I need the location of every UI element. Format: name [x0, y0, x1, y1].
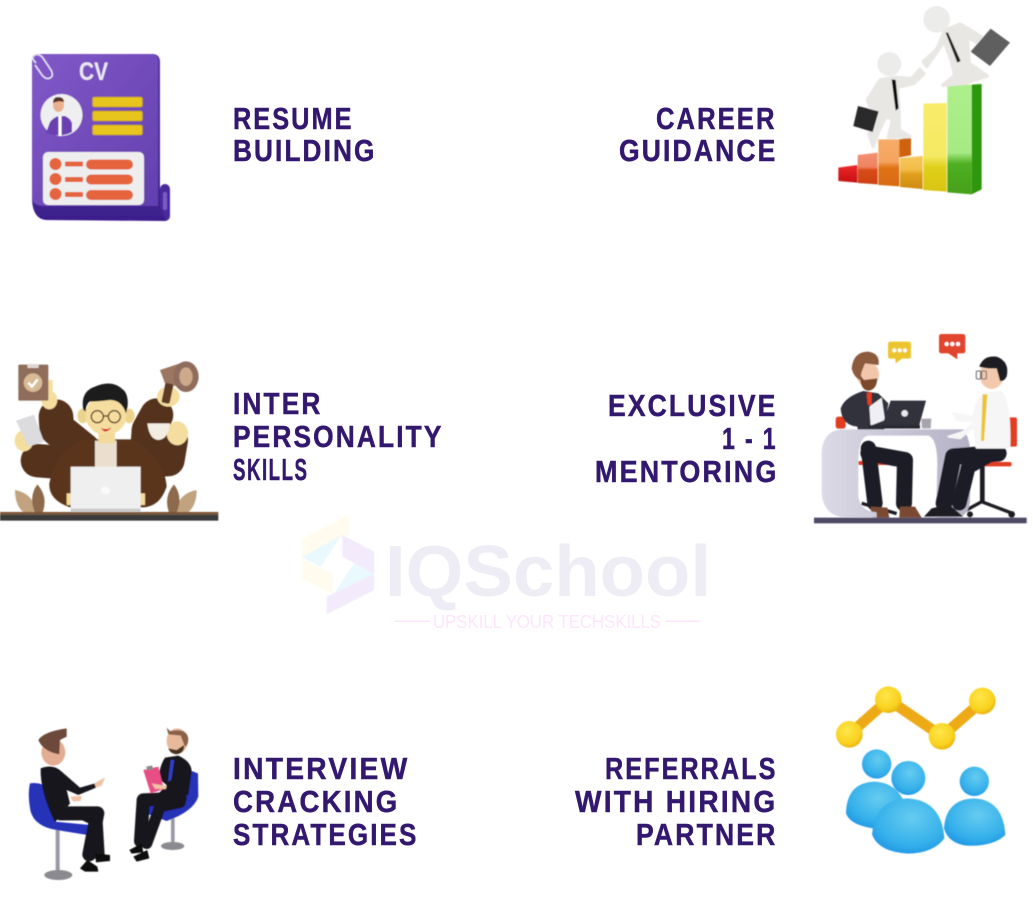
- watermark emblem: [302, 515, 374, 614]
- hands: [15, 380, 188, 505]
- heading: inter personality skills: [233, 386, 444, 487]
- icon: multitasking person: [0, 361, 218, 521]
- laptop: [71, 467, 141, 512]
- panel: resume building: [32, 54, 376, 221]
- details card: [43, 152, 144, 205]
- desk: [822, 429, 971, 517]
- CV label: CV: [79, 58, 108, 86]
- megaphone: [160, 361, 199, 404]
- heading: career guidance: [619, 101, 778, 168]
- watermark wordmark: IQSchool: [385, 532, 711, 612]
- panel: interview cracking strategies: [29, 728, 419, 880]
- leaves: [15, 484, 197, 512]
- speech bubbles: [888, 334, 965, 363]
- heading: exclusive 1-1 mentoring: EXCLUSIVE: [608, 388, 778, 423]
- network nodes: [836, 686, 996, 750]
- right person: [129, 728, 192, 862]
- icon: mentoring meeting: [814, 334, 1027, 523]
- heading: referrals with hiring partner: [575, 751, 778, 852]
- heading: interview cracking strategies: [233, 751, 418, 852]
- heading: referrals with hiring partner: PARTNER: [636, 817, 778, 852]
- floor: [814, 518, 1027, 523]
- bars: [838, 84, 982, 194]
- heading: interview cracking strategies: CRACKING: [233, 784, 400, 819]
- heading: career guidance: CAREER: [656, 101, 776, 136]
- heading: interview cracking strategies: INTERVIEW: [233, 751, 410, 786]
- heading: inter personality skills: SKILLS: [233, 452, 308, 487]
- right chair: [146, 771, 198, 850]
- colleague in white shirt: [924, 356, 1009, 517]
- icon: CV document: [32, 54, 170, 221]
- watermark: IQSchool logo: [302, 515, 711, 632]
- icon: interview chairs: [29, 728, 198, 880]
- panel: career guidance: [619, 6, 1010, 194]
- panel: referrals with hiring partner: [575, 686, 1005, 854]
- avatar: [40, 94, 82, 136]
- watermark tagline: UPSKILL YOUR TECHSKILLS: [433, 612, 661, 632]
- network links: [849, 700, 982, 736]
- heading: career guidance: GUIDANCE: [619, 133, 778, 168]
- heading: resume building: [233, 101, 376, 168]
- table: [0, 512, 218, 521]
- heading: referrals with hiring partner: REFERRALS: [605, 751, 778, 786]
- heading: inter personality skills: INTER: [233, 386, 322, 421]
- cup: [147, 423, 170, 440]
- icon: climbing bar chart: [838, 6, 1010, 194]
- heading: referrals with hiring partner: WITH HIRING: [575, 784, 778, 819]
- laptop and mug: [868, 401, 931, 429]
- heading: exclusive 1-1 mentoring: 1 - 1: [722, 421, 778, 456]
- heading: inter personality skills: PERSONALITY: [233, 419, 444, 454]
- chairs: [836, 417, 1017, 518]
- left person: [38, 728, 110, 872]
- clipboard: [18, 364, 48, 401]
- phone: [16, 415, 44, 447]
- shirt: [95, 441, 117, 467]
- head: [77, 383, 135, 443]
- left chair: [29, 783, 91, 880]
- panel: exclusive 1-1 mentoring: [595, 334, 1027, 523]
- heading: exclusive 1-1 mentoring: MENTORING: [595, 454, 778, 489]
- heading: interview cracking strategies: STRATEGIES: [233, 817, 418, 852]
- lower figure: [853, 52, 924, 147]
- sweater arms and torso: [37, 415, 172, 462]
- heading: resume building: RESUME: [233, 101, 354, 136]
- yellow text bars: [92, 97, 142, 135]
- people: [846, 749, 1005, 854]
- heading: resume building: BUILDING: [233, 133, 376, 168]
- upper figure: [923, 6, 1010, 85]
- icon: paperclip: [33, 54, 52, 79]
- panel: inter personality skills: [0, 361, 444, 521]
- heading: exclusive 1-1 mentoring: [595, 388, 778, 489]
- mentor with beard: [841, 352, 922, 518]
- icon: network of people: [836, 686, 1005, 854]
